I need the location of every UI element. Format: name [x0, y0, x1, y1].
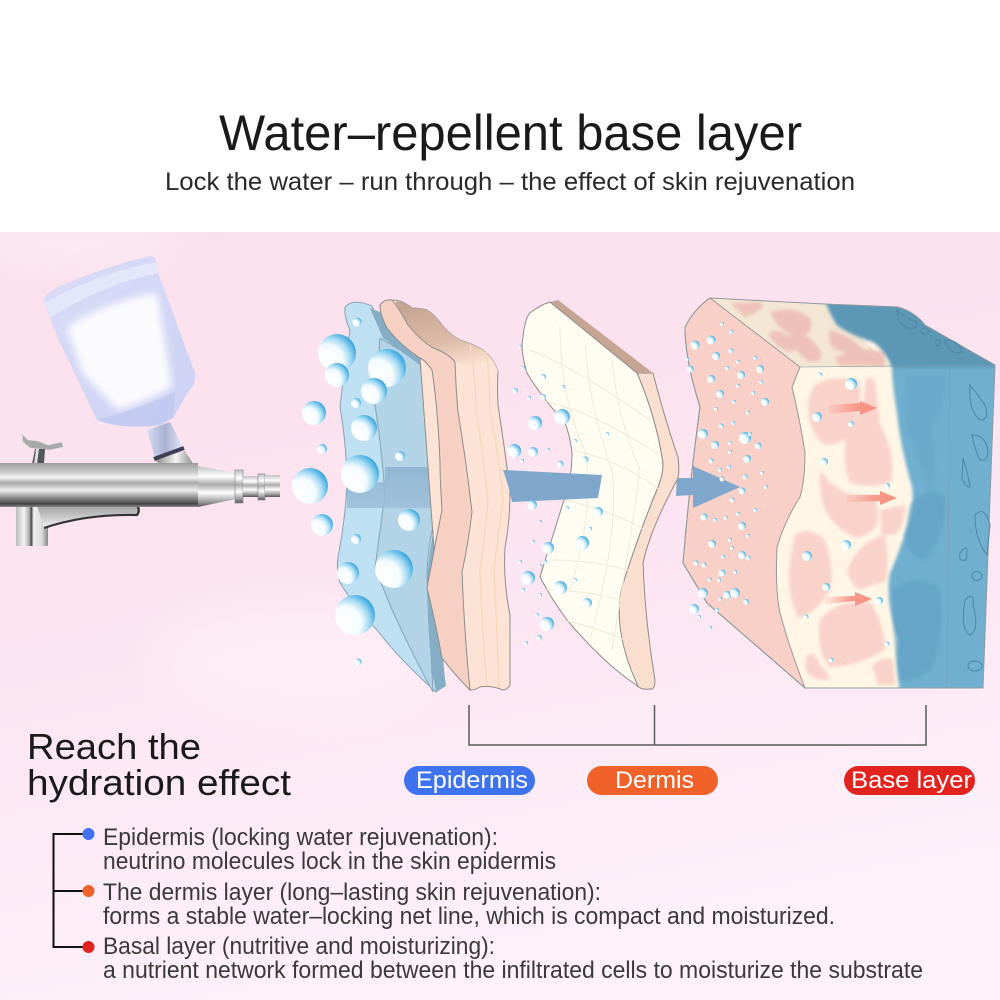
arrow: blue band between layers	[503, 470, 602, 502]
water droplets	[292, 318, 890, 666]
pink background panel	[0, 227, 1000, 1000]
arrow: cell flow middle	[847, 491, 897, 505]
heading: reach the hydration effect: Reach the	[27, 726, 201, 767]
blue base layer	[825, 300, 1000, 692]
label pill: base layer: Base layer	[851, 767, 972, 794]
skin layer: peach sheets	[380, 300, 510, 690]
skin layer: dermis net sheet	[522, 300, 679, 689]
bracket connecting layers to labels	[469, 705, 926, 745]
nozzle	[198, 466, 280, 507]
cube fill	[683, 298, 995, 688]
cream cells	[789, 378, 905, 685]
heading: reach the hydration effect	[27, 726, 291, 803]
epidermis inner sheet	[375, 338, 437, 692]
body barrel	[0, 463, 198, 507]
peach stripes	[470, 345, 503, 688]
epidermis dark edge	[370, 308, 446, 692]
arrow: blue pointer into block	[676, 466, 740, 508]
airbrush device	[0, 256, 280, 546]
cube edge lines	[800, 365, 995, 688]
label pill: dermis: Dermis	[615, 767, 694, 794]
skin layer: epidermis	[337, 302, 447, 692]
band arrow through epidermis	[347, 467, 440, 508]
dermis side	[619, 373, 679, 689]
title: Water–repellent base layer	[219, 105, 802, 161]
legend connector tree	[54, 834, 83, 947]
peach outer sheet	[380, 300, 510, 690]
dermis net lines	[530, 325, 660, 650]
skin block: base layer cube	[683, 298, 1000, 692]
heading: reach the hydration effect: hydration effect	[27, 762, 291, 803]
top face	[710, 298, 892, 367]
arrow: cell flow top	[828, 401, 877, 415]
label pill: epidermis: Epidermis	[416, 767, 528, 794]
subtitle: Lock the water – run through – the effect of skin rejuvenation	[165, 168, 855, 196]
label pill: dermis	[587, 766, 718, 795]
peach pink band	[380, 300, 472, 690]
arrow: cell flow bottom	[825, 592, 872, 606]
epidermis face	[337, 302, 447, 692]
cup neck	[147, 422, 183, 458]
legend item: dermis: forms a stable water–locking net line, which is compact and moisturized.	[103, 903, 835, 930]
legend item: basal layer: a nutrient network formed between the infiltrated cells to moisturize the substrate	[103, 957, 923, 984]
legend item: basal layer	[82, 933, 923, 984]
legend item: dermis	[82, 879, 835, 930]
legend item: epidermis	[82, 824, 556, 875]
air valve and trigger	[16, 504, 139, 546]
top face cells	[731, 302, 885, 366]
pink front-left layer	[683, 298, 805, 688]
legend item: dermis: The dermis layer (long–lasting skin rejuvenation):	[103, 879, 601, 906]
dermis net face	[522, 302, 663, 686]
blue shaded patches	[891, 492, 944, 680]
paint cup	[43, 256, 195, 427]
legend item: basal layer: Basal layer (nutritive and moisturizing):	[103, 933, 495, 960]
legend item: epidermis: Epidermis (locking water rejuvenation):	[103, 824, 498, 851]
thumb screw	[20, 434, 63, 471]
dermis top edge	[550, 300, 653, 373]
peach top shading	[395, 302, 498, 372]
cube outline	[683, 298, 995, 688]
basal outlines	[897, 310, 990, 671]
legend item: epidermis: neutrino molecules lock in the skin epidermis	[103, 848, 556, 875]
connector	[154, 448, 197, 476]
